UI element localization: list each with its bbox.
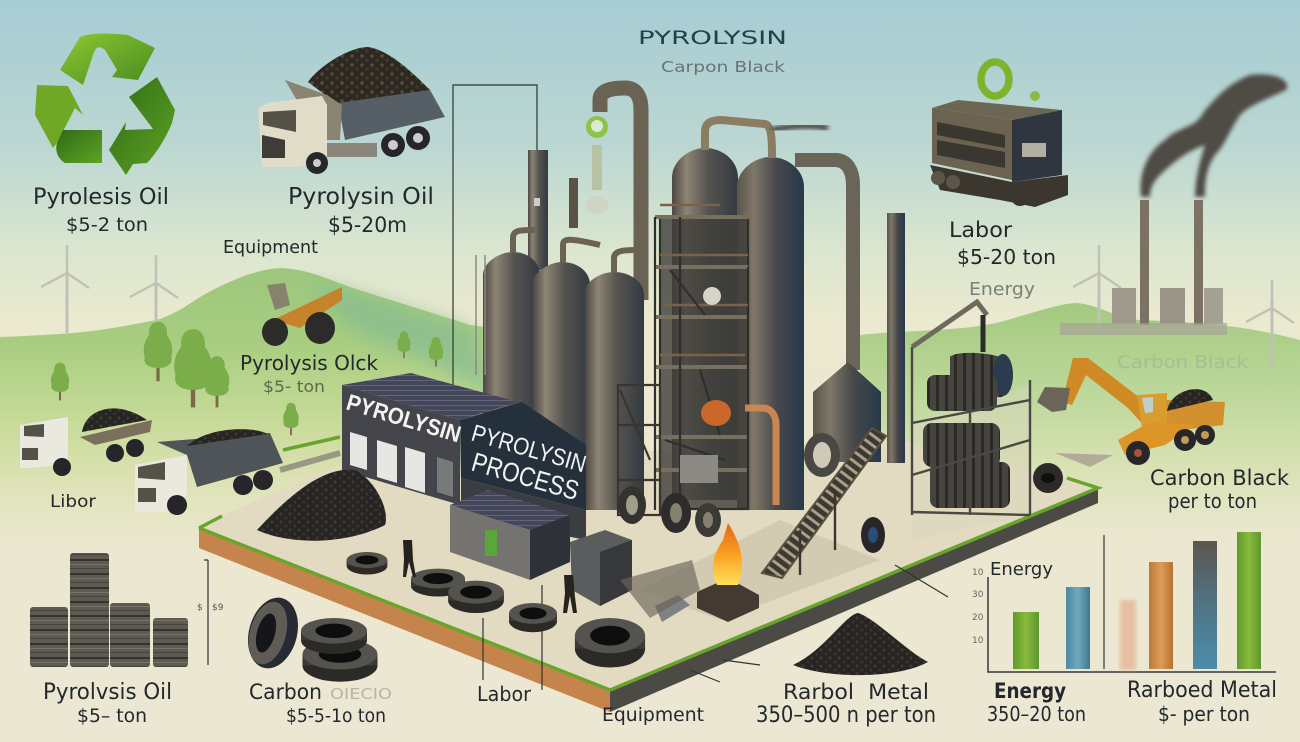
chart axis ticks: 10: [972, 568, 984, 578]
label: price: $5– ton: [77, 705, 147, 727]
label: Pyrolesis Oil: Pyrolesis Oil: [33, 185, 169, 210]
large building: [342, 373, 589, 540]
small excavator on hill: [262, 283, 342, 346]
tires on platform: [347, 552, 645, 668]
far right column: [887, 213, 905, 463]
generator machine: [930, 100, 1068, 207]
left trucks: [20, 408, 283, 515]
tire rack with crane: [912, 302, 1063, 540]
bar orange: [1149, 562, 1173, 669]
tall tower 2: [737, 157, 804, 510]
label: per to ton: per to ton: [1168, 489, 1257, 513]
tall tower 1: [672, 148, 738, 500]
subtitle: Carpon Black: [661, 58, 785, 76]
label: Pyrolysis Olck: Pyrolysis Olck: [240, 351, 378, 375]
smokestacks with smoke: [1060, 74, 1287, 335]
green ring icon: [981, 62, 1040, 101]
platform: [199, 437, 1098, 712]
label: Rarboed Metal: Rarboed Metal: [1127, 678, 1277, 703]
label: Equipment: Equipment: [602, 704, 704, 726]
bar tall green: [1237, 532, 1261, 669]
label: price: $5-2 ton: [66, 214, 148, 236]
wind turbines: [41, 245, 1294, 368]
scaffold tower: [655, 205, 750, 510]
label: price: $5- ton: [263, 377, 325, 396]
chart axis ticks: 30: [972, 590, 984, 600]
chart axis ticks: 10: [972, 636, 984, 646]
dump truck top: [258, 47, 445, 174]
pipe right: [795, 160, 853, 370]
smoke wisp: [772, 126, 828, 130]
stair structure: [618, 385, 660, 515]
label: price: $5-5-1o ton: [286, 705, 386, 727]
machine debris: [620, 560, 700, 622]
orange burner: [680, 287, 776, 505]
crate box: [570, 530, 632, 606]
chart label: Energy: Energy: [990, 559, 1053, 580]
label: Libor: Libor: [50, 492, 96, 512]
big pipe left: [600, 88, 641, 300]
label: Energy faint: Energy: [969, 279, 1035, 300]
bar green: [1013, 612, 1039, 669]
trees: [51, 322, 443, 435]
label: price: $5-20 ton: [957, 245, 1056, 269]
thin callout lines: [204, 85, 948, 690]
small utility building: [450, 490, 570, 580]
label: Rarbol Metal: Rarbol Metal: [783, 680, 929, 704]
tires under tower: [618, 433, 840, 537]
rubber pile left: [257, 470, 386, 541]
label: Pyrolysin Oil: Pyrolysin Oil: [288, 184, 434, 210]
axis value: $9: [212, 603, 224, 613]
building sign: PYROLYSIN PROCESS: PYROLYSIN: [468, 420, 589, 478]
workers: [403, 540, 577, 613]
label: 350-20 ton: 350–20 ton: [987, 702, 1086, 726]
bar blue: [1066, 587, 1090, 669]
yellow excavator truck: [1037, 358, 1225, 467]
label: Carbon: Carbon: [249, 680, 322, 704]
bar slate: [1193, 541, 1217, 669]
label: faint word: OIECIO: [330, 685, 392, 703]
lower right tank: [813, 362, 881, 462]
conveyor: [762, 428, 886, 578]
title: PYROLYSIN: [638, 27, 787, 49]
label: Carbon Black: Carbon Black: [1150, 466, 1290, 490]
tire stacks chart: [30, 553, 188, 667]
green hanging tag: [586, 116, 608, 214]
label: Energy bold: Energy: [994, 679, 1066, 703]
landscape hills: [0, 268, 1300, 545]
flame on stand: [697, 523, 759, 622]
label: Equipment: Equipment: [223, 237, 318, 258]
label: per ton: $- per ton: [1158, 702, 1250, 726]
bar chart: [972, 532, 1276, 672]
axis marks: $: [197, 603, 203, 613]
coal pile: [793, 613, 928, 675]
faint label: Carbon Black: Carbon Black: [1117, 352, 1249, 373]
recycling icon: [35, 34, 175, 175]
label: Labor: Labor: [477, 682, 532, 706]
small tanks: [476, 230, 644, 510]
building sign: PROCESS: PROCESS: [468, 447, 582, 506]
slender column: [528, 150, 578, 270]
tire group: [241, 592, 378, 682]
top connecting pipe: [705, 120, 772, 158]
chart axis ticks: [972, 568, 984, 646]
label: Labor: Labor: [949, 218, 1012, 242]
label: Pyrolvsis Oil: Pyrolvsis Oil: [43, 680, 172, 705]
label: price: $5-20m: [328, 213, 407, 237]
building sign: PYROLYSIN: PYROLYSIN: [344, 389, 464, 447]
chart axis ticks: 20: [972, 613, 984, 623]
label: 350-500 per ton: 350–500 n per ton: [756, 703, 936, 728]
